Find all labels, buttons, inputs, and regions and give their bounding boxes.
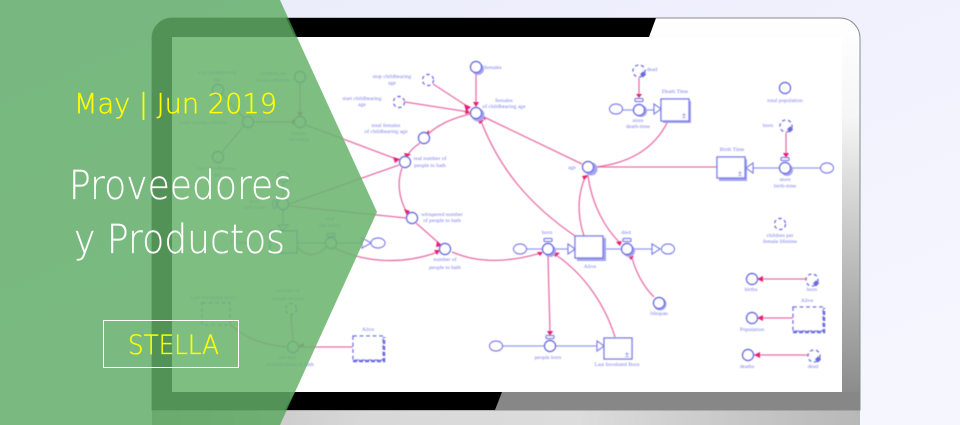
converter: real number of people to bath — [400, 155, 447, 169]
ghost: children per female lifetime: female lifetime — [763, 238, 798, 245]
converter: total females — [364, 122, 430, 144]
converter pair: Population: Population — [740, 327, 764, 333]
hidden left diagram: of individuals in bath — [266, 361, 314, 368]
converter: real number of people to bath: people to bath — [414, 163, 446, 169]
converter: number of people to bath: number of — [433, 256, 457, 263]
hidden left diagram: female lifetime — [256, 77, 291, 84]
hidden left diagram: fecundity — [288, 136, 310, 143]
converter pair: Population: Alive — [801, 298, 814, 304]
ghost and flow: store birth-time: born — [763, 123, 773, 129]
date: May | Jun 2019 — [74, 87, 277, 120]
converter: females: females — [484, 64, 502, 71]
connector lines — [222, 74, 808, 355]
flow: died: died — [621, 230, 631, 236]
bezel bottom black band — [285, 392, 502, 410]
converter: females of childbearing age: of childbearing age — [482, 103, 526, 110]
converter pair: Population — [740, 298, 824, 333]
converter pair: births: born — [807, 287, 817, 293]
ghost stock: Alive: Alive — [362, 327, 375, 333]
flow pipes — [283, 110, 820, 346]
hidden left diagram: total — [325, 216, 335, 222]
product tag: STELLA: STELLA — [128, 330, 219, 361]
hidden left diagram: children per — [260, 71, 287, 77]
flow: died — [621, 230, 674, 257]
converter: total females: of childbearing age — [364, 128, 408, 135]
flow: born: born — [542, 230, 552, 236]
connector arrowheads — [292, 94, 789, 358]
laptop — [152, 18, 860, 425]
converter: females — [470, 62, 502, 75]
converter: lifespan: lifespan — [650, 310, 668, 317]
stock: Death Time: ± — [682, 111, 687, 120]
converter pair: deaths — [740, 350, 821, 370]
title: y Productos — [74, 217, 285, 263]
ghost: start childbearing age — [342, 96, 404, 108]
stock: Last Involuted Born — [594, 338, 640, 368]
hidden left diagram: number of — [276, 287, 300, 294]
hidden left diagram: start childbearing — [196, 166, 236, 172]
converter pair: deaths: deaths — [740, 364, 754, 370]
converter: total population: total population — [767, 98, 803, 104]
converter: age: age — [568, 165, 576, 171]
ghost and flow: store death-time — [610, 65, 661, 130]
hidden left diagram: age — [213, 172, 221, 178]
flow: born — [514, 230, 575, 257]
converter: females of childbearing age: females — [495, 97, 513, 104]
flow: people born: people born — [535, 355, 561, 361]
converter: lifespan — [650, 298, 668, 317]
title — [69, 163, 292, 263]
converter: whispered number: whispered number — [421, 212, 463, 218]
ghost and flow: store birth-time: store — [780, 177, 791, 183]
hidden left diagram: store — [250, 199, 261, 205]
screen — [172, 37, 842, 392]
ghost: stop childbearing age: stop childbearing — [373, 74, 412, 80]
hidden left diagram: stop childbearing — [198, 70, 237, 76]
converter: total population — [767, 82, 803, 104]
ghost: children per female lifetime: children per — [767, 233, 794, 239]
stock: Birth Time: ± — [738, 169, 743, 178]
title: Proveedores — [69, 163, 292, 209]
converter pair: deaths: dead — [808, 364, 818, 370]
hidden left diagram: female — [291, 130, 307, 137]
ghost stock: Alive — [353, 327, 384, 361]
hidden left diagram: age — [213, 77, 221, 83]
bezel top black band — [286, 18, 656, 37]
ghost: start childbearing age: age — [358, 102, 366, 108]
converter: number of people to bath — [429, 244, 461, 271]
hidden left diagram: Females — [231, 240, 249, 246]
hidden left diagram: fall ovum — [319, 222, 341, 229]
ghost and flow: store death-time: dead — [647, 67, 657, 73]
ghost: stop childbearing age: age — [388, 80, 396, 86]
stock: Last Involuted Born: ± — [625, 350, 630, 359]
ghost: stop childbearing age — [373, 74, 434, 86]
converter: whispered number: of people to bath — [423, 217, 461, 224]
stock: Alive — [575, 236, 606, 270]
stock: Death Time: Death Time — [662, 89, 689, 95]
hidden left diagram — [179, 70, 385, 368]
stock: Last Involuted Born: Last Involuted Born — [594, 362, 640, 368]
hidden left diagram: one and — [278, 355, 296, 361]
fade over diagram under banner — [172, 37, 377, 392]
hidden left diagram: people to bath — [272, 296, 304, 302]
converter: whispered number — [406, 212, 463, 224]
converter: females of childbearing age — [470, 97, 526, 122]
converter: total females: total females — [372, 122, 400, 129]
laptop base — [152, 410, 860, 425]
ghost: children per female lifetime — [763, 218, 798, 245]
bezel left side — [152, 18, 300, 410]
converter pair: births: births — [745, 287, 757, 293]
stock: Birth Time: Birth Time — [720, 147, 745, 153]
green arrow banner — [0, 0, 377, 425]
ghost: start childbearing age: start childbearing — [342, 96, 382, 102]
bezel bottom grey band — [290, 392, 860, 410]
hidden left diagram: Last Involuted Born — [190, 295, 236, 301]
converter: real number of people to bath: real number of — [414, 155, 447, 162]
ghost and flow: store birth-time: birth-time — [774, 184, 797, 190]
ghost and flow: store death-time: death-time — [626, 124, 650, 130]
converter pair: births — [745, 274, 819, 293]
hidden left diagram: fall ovum — [244, 204, 266, 211]
hidden left diagram: years having children — [179, 120, 227, 126]
ghost and flow: store death-time: store — [633, 118, 644, 124]
converter: number of people to bath: people to bath — [429, 265, 461, 271]
ghost and flow: store birth-time — [746, 120, 834, 190]
stock: Death Time — [661, 89, 691, 123]
converter: age — [568, 162, 598, 176]
flow: people born — [490, 336, 604, 361]
stock and flow diagram — [179, 62, 834, 370]
product tag: STELLA — [104, 320, 238, 368]
laptop bezel — [152, 18, 860, 410]
stock: Alive: Alive — [584, 264, 597, 270]
stock: Birth Time — [717, 147, 747, 181]
